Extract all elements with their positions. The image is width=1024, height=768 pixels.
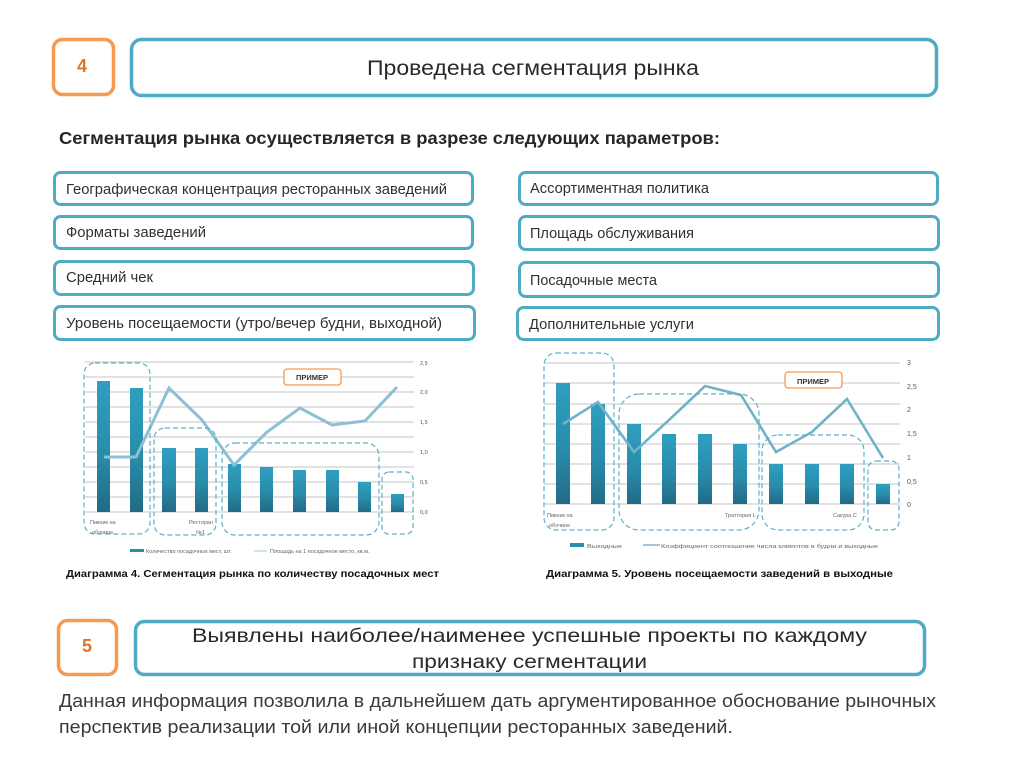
right axis: 2,0 xyxy=(420,390,428,396)
section 4 title: Проведена сегментация рынка xyxy=(367,57,699,80)
legend: Коэффициент соотношение числа клиентов в будни и выходные xyxy=(661,544,878,550)
right axis: 0,5 xyxy=(907,479,917,486)
parameter: service area xyxy=(520,216,938,250)
subheading: Сегментация рынка осуществляется в разрезе следующих параметров: xyxy=(59,128,720,148)
legend: Площадь на 1 посадочное место, кв.м. xyxy=(270,549,370,555)
parameter: extra services xyxy=(518,308,938,340)
chart 4: seats xyxy=(84,361,428,555)
right axis: 1,5 xyxy=(420,420,428,426)
parameter: attendance: Уровень посещаемости (утро/вечер будни, выходной) xyxy=(66,316,442,332)
right axis: 1 xyxy=(907,455,911,462)
segment groups xyxy=(544,353,899,530)
parameter: formats xyxy=(54,216,472,248)
right axis: 0 xyxy=(907,502,911,509)
right axis: 0,0 xyxy=(420,510,428,516)
parameter: assortment: Ассортиментная политика xyxy=(530,181,710,197)
right axis: 2,5 xyxy=(907,384,917,391)
example tag xyxy=(284,369,341,385)
parameter: formats: Форматы заведений xyxy=(66,225,206,241)
right axis: 3 xyxy=(907,360,911,367)
line: client ratio xyxy=(563,386,883,458)
section 5 title xyxy=(136,622,924,674)
section 5 title: признаку сегментации xyxy=(412,651,647,673)
parameter: geographic concentration xyxy=(54,172,472,204)
category labels: Пикник на xyxy=(547,513,574,519)
line: area per seat xyxy=(104,387,397,465)
parameter: service area: Площадь обслуживания xyxy=(530,226,694,242)
category labels: №1 xyxy=(196,530,205,536)
chart 4 caption: Диаграмма 4. Сегментация рынка по количеству посадочных мест xyxy=(66,568,439,580)
conclusion text: перспектив реализации той или иной концепции ресторанных заведений. xyxy=(59,716,733,737)
category labels xyxy=(547,513,857,529)
legend: Выходные xyxy=(587,544,622,550)
chart 5: attendance xyxy=(544,353,917,550)
grid lines xyxy=(544,363,900,504)
right axis: 2 xyxy=(907,407,911,414)
chart 5 caption: Диаграмма 5. Уровень посещаемости заведений в выходные xyxy=(546,568,893,580)
example tag: ПРИМЕР xyxy=(797,377,829,386)
grid lines xyxy=(85,362,414,512)
category labels: Траттория L xyxy=(725,513,756,519)
parameter: assortment xyxy=(520,172,938,204)
section 5 title: Выявлены наиболее/наименее успешные проекты по каждому xyxy=(192,625,867,647)
section 5 number badge: 5 xyxy=(82,636,92,656)
right axis xyxy=(907,360,917,509)
section 4 number badge xyxy=(54,40,114,94)
right axis: 2,5 xyxy=(420,361,428,367)
category labels xyxy=(90,520,213,536)
category labels: обочине xyxy=(92,530,113,536)
category labels: Ресторан xyxy=(189,520,213,526)
conclusion text: Данная информация позволила в дальнейшем дать аргументированное обоснование рыночных xyxy=(59,690,937,711)
category labels: обочине xyxy=(549,523,570,529)
parameter: average check: Средний чек xyxy=(66,270,154,286)
example tag xyxy=(785,372,842,388)
parameter: geographic concentration: Географическая концентрация ресторанных заведений xyxy=(66,182,447,198)
section 4 title xyxy=(132,40,936,96)
category labels: Пикник на xyxy=(90,520,117,526)
segment groups xyxy=(84,363,413,535)
right axis: 1,0 xyxy=(420,450,428,456)
section 4 number badge: 4 xyxy=(77,56,87,76)
parameter: seats: Посадочные места xyxy=(530,273,658,289)
right axis: 0,5 xyxy=(420,480,428,486)
legend xyxy=(130,549,370,555)
parameter: attendance xyxy=(54,306,474,340)
right axis xyxy=(420,361,428,516)
parameter: extra services: Дополнительные услуги xyxy=(529,317,694,333)
parameter: average check xyxy=(54,262,474,294)
section 5 number badge xyxy=(58,620,116,674)
parameter: seats xyxy=(520,262,938,296)
bars xyxy=(556,383,890,504)
category labels: Сакура С xyxy=(833,513,857,519)
legend xyxy=(570,543,878,550)
example tag: ПРИМЕР xyxy=(296,373,328,382)
legend: Количество посадочных мест, шт. xyxy=(146,549,232,555)
conclusion text xyxy=(59,690,937,737)
bars xyxy=(97,381,404,512)
right axis: 1,5 xyxy=(907,431,917,438)
